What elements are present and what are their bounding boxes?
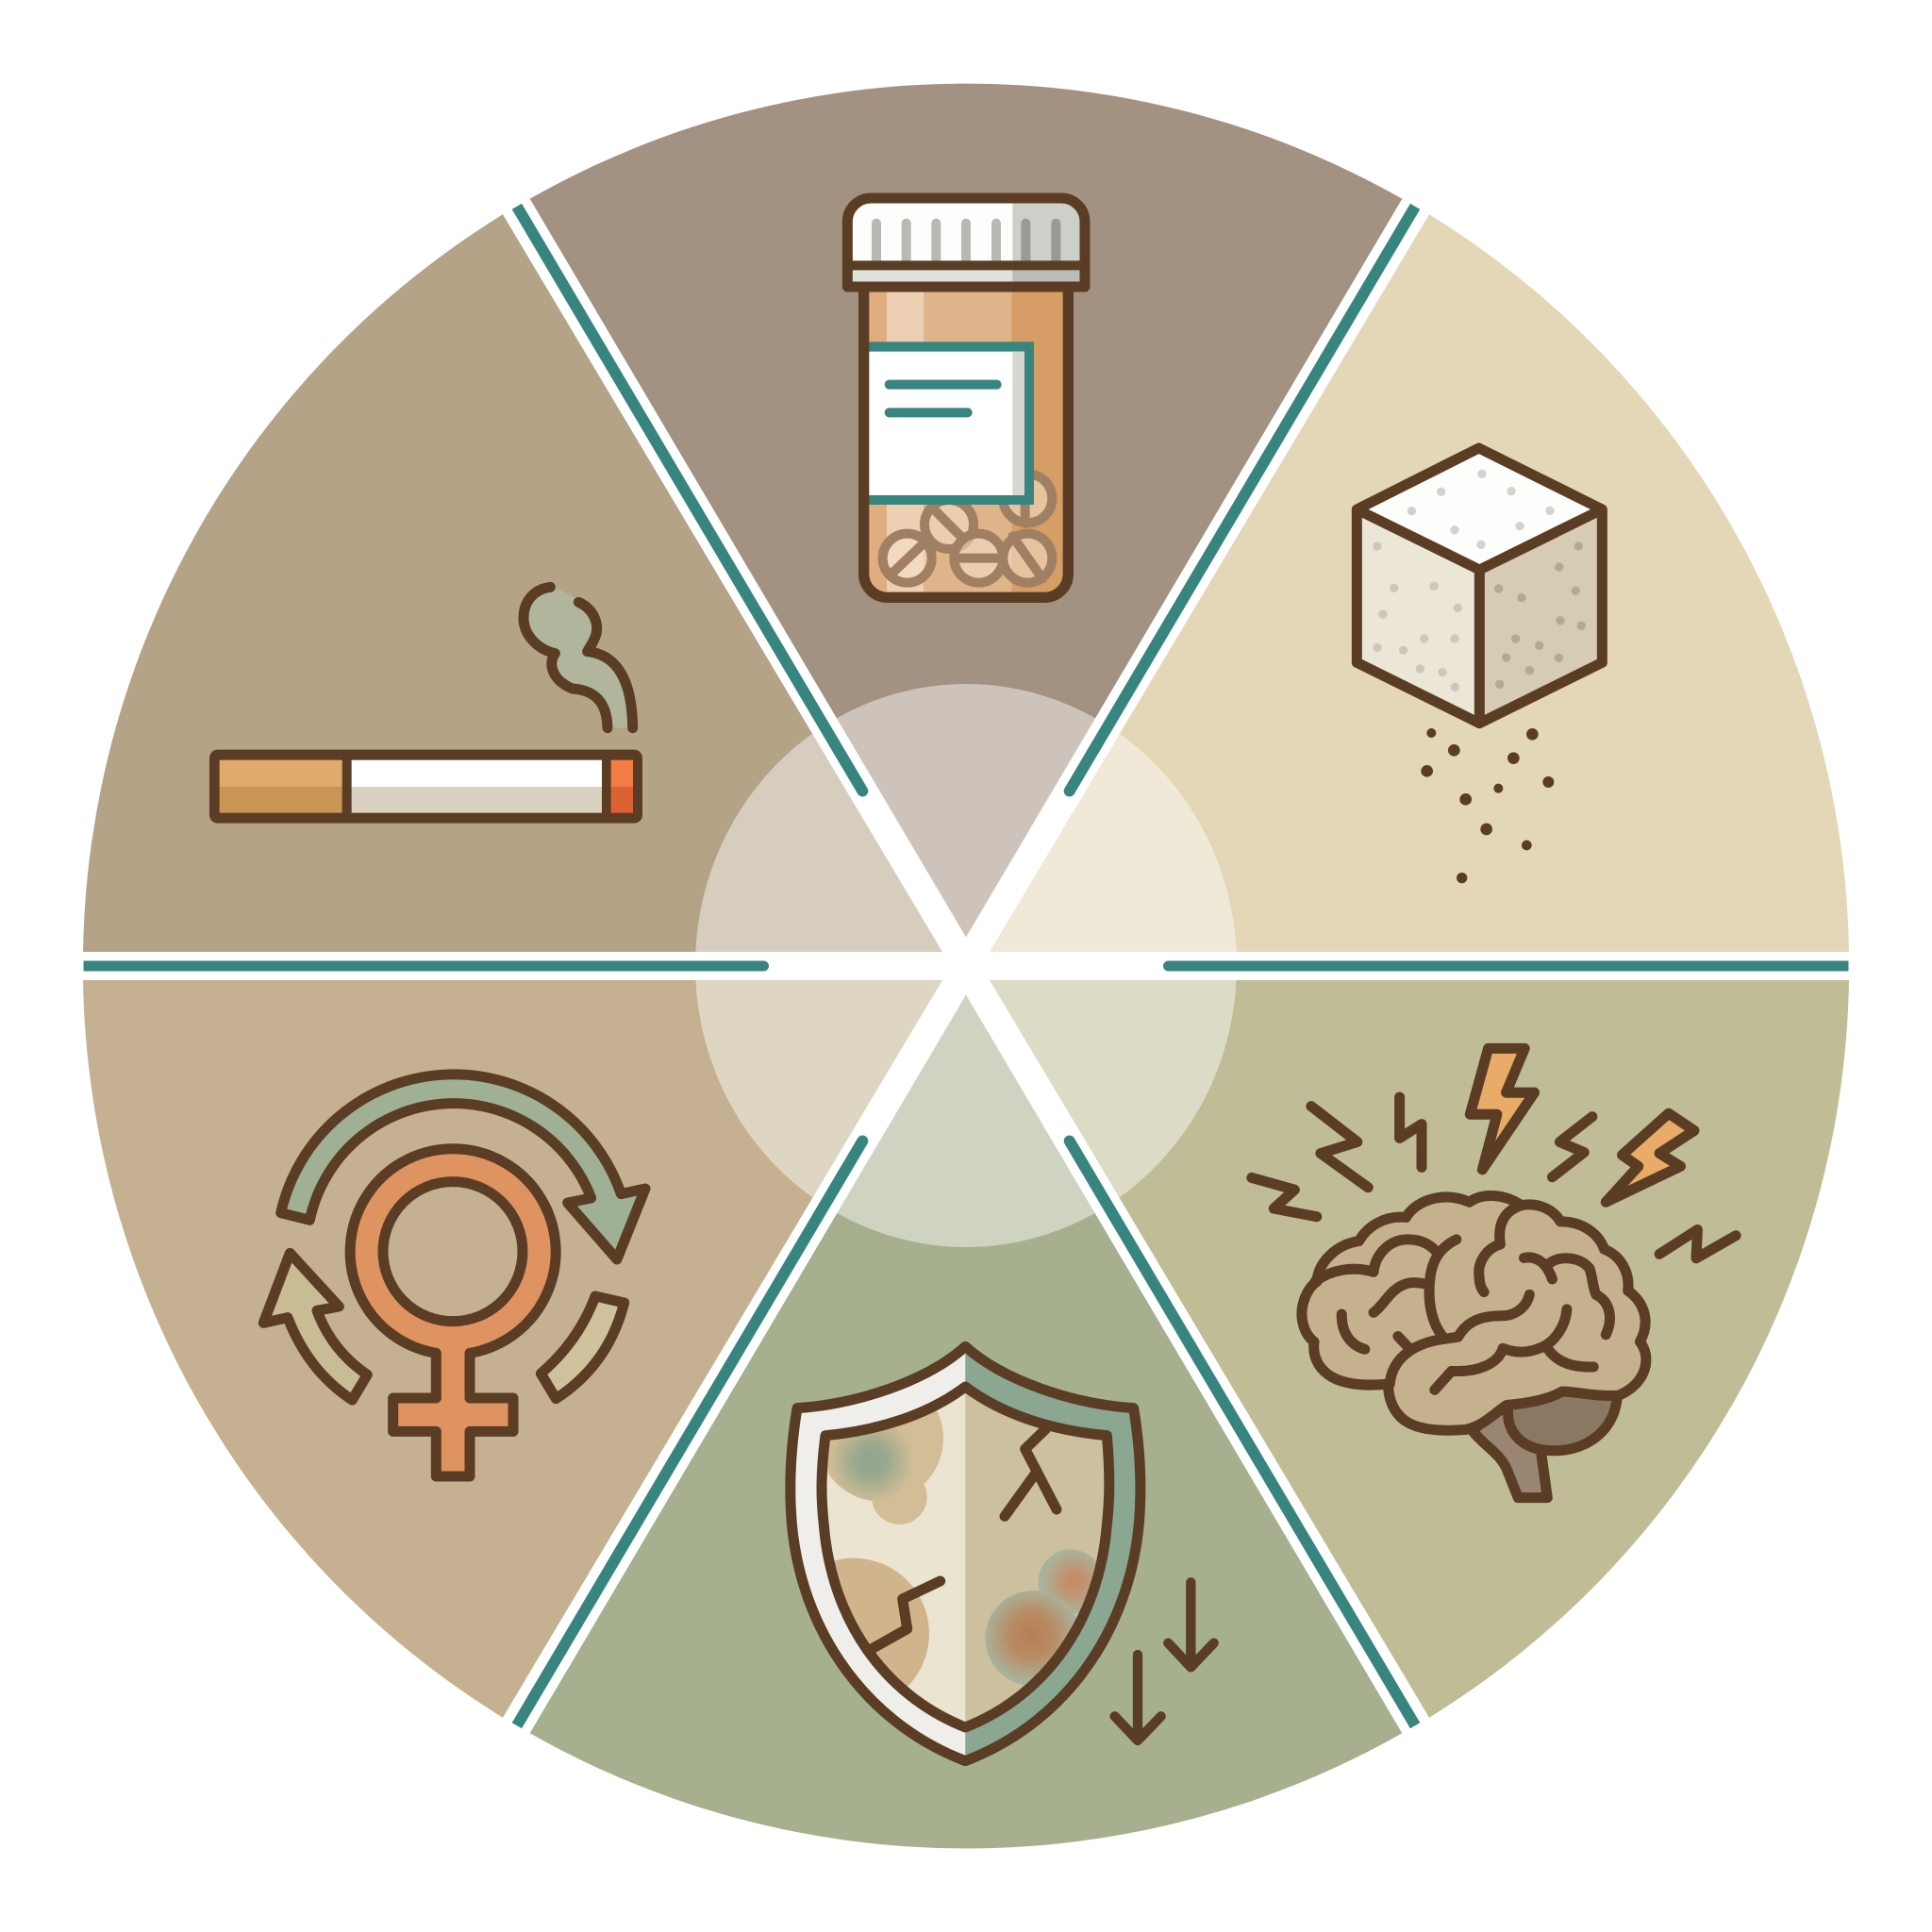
icon: cigarette with smoke	[214, 587, 638, 818]
panel: lower right sector	[990, 980, 1849, 1718]
right bolt	[1606, 1113, 1694, 1202]
icon: female symbol with cycle arrows	[263, 1074, 645, 1476]
panel: bottom sector	[530, 994, 1402, 1848]
icon: cracked shield with down arrows	[778, 1340, 1214, 1767]
panel: upper left sector	[83, 214, 942, 952]
smoke	[524, 587, 633, 728]
icon: sugar cube	[1357, 448, 1602, 883]
centre translucent disc	[695, 684, 1237, 1247]
venus symbol	[350, 1149, 556, 1476]
panel: lower left sector	[83, 980, 942, 1718]
panel: upper right sector	[990, 214, 1849, 952]
large green arrow	[281, 1074, 645, 1259]
cerebellum	[1507, 1373, 1617, 1451]
left tan arrow	[263, 1253, 367, 1400]
icon: brain with lightning bolts	[1252, 1048, 1736, 1498]
icon: pill bottle	[842, 195, 1090, 599]
shield	[778, 1340, 1148, 1767]
brain stem	[1473, 1402, 1547, 1498]
down arrows	[1115, 1582, 1214, 1740]
panel: top sector	[530, 84, 1402, 938]
brain folds	[1315, 1206, 1609, 1390]
small zigzag sparks	[1252, 1097, 1736, 1258]
teal spokes	[57, 187, 1877, 1745]
right tan arc	[541, 1296, 625, 1399]
large bolt	[1470, 1048, 1535, 1170]
cerebrum	[1302, 1195, 1646, 1430]
